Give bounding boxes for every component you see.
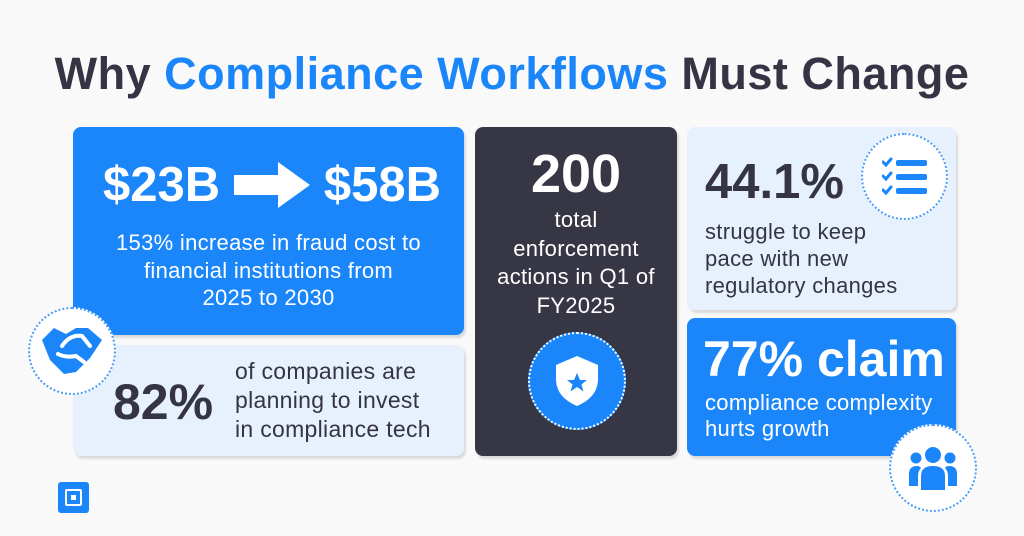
icon: checklist [861, 133, 948, 220]
text: fraud description: 2025 to 2030 [202, 285, 335, 310]
text: enforcement description: actions in Q1 of [497, 264, 655, 289]
text: complexity description: hurts growth [705, 416, 830, 441]
panel: fraud cost [73, 127, 464, 335]
icon: people [889, 424, 977, 512]
stat: $23B to $58B: $58B [324, 158, 441, 212]
text: fraud description: financial institutions from [144, 258, 393, 282]
stat: 200: 200 [531, 144, 621, 204]
text: regulatory description [705, 219, 898, 298]
text: investment description [235, 358, 431, 442]
text: enforcement description: enforcement [513, 236, 639, 260]
text: regulatory description: struggle to keep [705, 219, 866, 244]
text: investment description: planning to invest [235, 387, 419, 413]
text: regulatory description: regulatory changes [705, 273, 898, 298]
text: fraud description: 153% increase in fraud cost to [116, 230, 421, 255]
text: enforcement description: total [554, 207, 598, 232]
stat: 77% claim: 77% claim [703, 331, 945, 387]
stat: 82%: 82% [113, 374, 213, 430]
text: regulatory description: pace with new [705, 246, 848, 271]
icon: logo [58, 482, 89, 513]
panel: complexity hurts growth [687, 318, 956, 456]
stat: 44.1%: 44.1% [705, 155, 844, 209]
text: enforcement description: FY2025 [537, 292, 615, 318]
icon: arrow [234, 162, 310, 208]
stat: $23B to $58B: $23B [103, 158, 220, 212]
panel: regulatory pace [687, 127, 956, 310]
icon: shield [528, 332, 626, 430]
stat: $23B to $58B [103, 158, 441, 212]
text: enforcement description [497, 207, 655, 318]
text: investment description: of companies are [235, 358, 416, 384]
title: Why Compliance Workflows Must Change [55, 48, 969, 99]
text: complexity description: compliance complexity [705, 390, 933, 415]
panel: enforcement actions [475, 127, 677, 456]
panel: compliance tech investment [73, 345, 464, 456]
icon: handshake [28, 307, 116, 395]
text: complexity description [705, 390, 933, 441]
text: investment description: in compliance tech [235, 416, 431, 442]
text: fraud description [116, 230, 421, 310]
